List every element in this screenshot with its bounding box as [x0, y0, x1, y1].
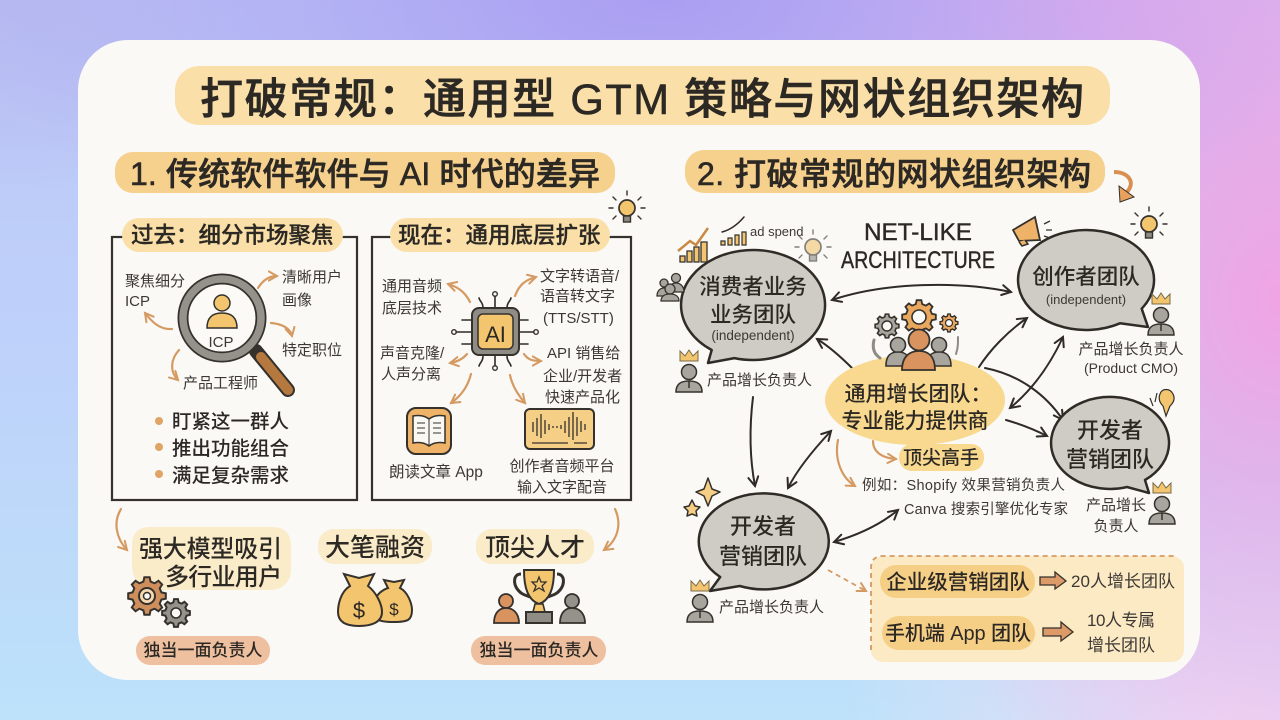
text: specific role: 特定职位 [282, 342, 342, 359]
text: TTS STT [540, 268, 620, 327]
tag: solo lead left [136, 636, 270, 665]
arrows: chip [448, 277, 541, 403]
heading: net-like architecture: ARCHITECTURE [841, 247, 995, 274]
icon: bulb [609, 191, 645, 222]
icon: money bags: $ [353, 598, 365, 623]
bullet list: 推出功能组合 [172, 438, 289, 460]
icon: lightning spark [1150, 390, 1174, 416]
title: 打破常规：通用型 GTM 策略与网状组织架构 [200, 76, 1084, 124]
icon: team with gears [873, 300, 958, 370]
row: enterprise marketing: 企业级营销团队 [886, 571, 1030, 594]
main card [78, 40, 1200, 680]
bubble: developer marketing team right: 营销团队 [1066, 447, 1154, 472]
heading: net-like architecture [841, 219, 995, 274]
panel: present general expansion: 现在：通用底层扩张 [398, 223, 601, 248]
arrow: left down [116, 509, 127, 550]
network arrows [751, 285, 1063, 591]
heading: section 2: 2. 打破常规的网状组织架构 [697, 156, 1091, 192]
bubble: developer marketing team right [1051, 397, 1169, 493]
row: enterprise marketing [880, 565, 1175, 598]
arrow: right down [604, 509, 618, 550]
panel: present general expansion [372, 191, 645, 500]
icon: stars [684, 478, 720, 516]
bubble: developer marketing team left [699, 493, 829, 591]
leader: creator team: 产品增长负责人 [1078, 341, 1184, 358]
text: product engineer: 产品工程师 [183, 375, 258, 392]
leader: developer team left [687, 580, 824, 622]
central growth team: 专业能力提供商 [842, 410, 988, 433]
icon: creator bulb [1131, 207, 1167, 238]
panel: past niche focus: 画像 [282, 292, 312, 309]
icon: book app [407, 408, 451, 454]
text: general audio base tech: 通用音频 [382, 278, 442, 295]
central growth team: 通用增长团队： [844, 383, 992, 406]
row: mobile app [882, 611, 1155, 655]
callout: strong model: 强大模型吸引 [139, 536, 282, 563]
leader: developer team right [1086, 482, 1175, 535]
bubble: consumer business team [681, 250, 825, 363]
heading: net-like architecture: NET-LIKE [864, 219, 972, 246]
icon: waveform [525, 409, 594, 449]
tag: solo lead right: 独当一面负责人 [480, 641, 598, 660]
text: reading app: 朗读文章 App [389, 463, 483, 481]
text: TTS STT: 文字转语音/ [540, 268, 620, 285]
bullet list [155, 411, 289, 487]
bubble: consumer business team: 消费者业务 [699, 275, 807, 299]
text: examples [862, 477, 1068, 518]
callout: strong model [132, 527, 291, 591]
callout: top talent: 顶尖人才 [485, 534, 585, 562]
panel: past niche focus: ICP [125, 293, 150, 310]
bullet list: 盯紧这一群人 [172, 411, 289, 433]
text: focus ICP: 聚焦细分 [125, 273, 185, 290]
row: mobile app: 手机端 App 团队 [885, 622, 1031, 645]
icon: trophy with people [494, 570, 585, 623]
text: API sales: 快速产品化 [545, 389, 620, 406]
arrows: magnifier [145, 276, 292, 380]
leader: developer team left: 产品增长负责人 [719, 599, 824, 616]
callout: top talent [476, 529, 594, 564]
callout: strong model: 多行业用户 [165, 564, 282, 591]
leader: developer team right: 负责人 [1093, 518, 1139, 535]
tag: top experts [899, 444, 984, 471]
row: enterprise marketing: 20人增长团队 [1071, 572, 1175, 591]
text: creator audio platform: 创作者音频平台 [509, 458, 615, 475]
tag: top experts: 顶尖高手 [903, 447, 979, 469]
panel: section 1 [112, 152, 645, 665]
leader: creator team [1078, 293, 1184, 376]
bubble: developer marketing team left: 开发者 [730, 514, 796, 539]
icon: money bags: $ [389, 600, 399, 619]
panel: present general expansion: 人声分离 [381, 365, 441, 383]
bubble: developer marketing team left: 营销团队 [719, 544, 807, 569]
tag: solo lead left: 独当一面负责人 [144, 641, 262, 660]
text: TTS STT: (TTS/STT) [543, 310, 614, 327]
text: API sales [543, 345, 622, 406]
text: clear persona: 清晰用户 [282, 269, 342, 286]
panel: present general expansion: 输入文字配音 [517, 479, 607, 496]
arrow: heading curl [1114, 172, 1134, 202]
icon: growth charts and ad spend [678, 217, 804, 262]
icon: megaphone [1013, 217, 1052, 246]
panel: example team sizes [871, 556, 1184, 662]
icon: money bags [338, 574, 412, 626]
leader: developer team right: 产品增长 [1086, 497, 1146, 514]
bubble: developer marketing team right: 开发者 [1077, 418, 1143, 443]
bubble: creator team: (independent) [1046, 292, 1126, 307]
callout: big funding: 大笔融资 [325, 534, 425, 562]
bubble: consumer business team: 业务团队 [710, 303, 796, 327]
icon: magnifier with ICP: ICP [208, 334, 234, 351]
icon: pale bulb [795, 230, 831, 261]
icon: people group [657, 274, 684, 301]
bubble: creator team [1018, 230, 1154, 330]
panel: past niche focus: 过去：细分市场聚焦 [131, 223, 334, 248]
icon: AI chip: AI [485, 322, 506, 347]
row: mobile app: 增长团队 [1087, 636, 1155, 655]
bubble: creator team: 创作者团队 [1032, 265, 1140, 289]
row: mobile app: 10人专属 [1087, 611, 1155, 630]
leader: creator team: (Product CMO) [1084, 360, 1178, 376]
panel: past niche focus [112, 218, 357, 500]
panel: present general expansion: 底层技术 [382, 300, 442, 317]
leader: consumer team: 产品增长负责人 [707, 372, 812, 389]
text: API sales: API 销售给 [547, 345, 620, 362]
bubble: consumer business team: (independent) [711, 328, 795, 343]
text: examples: Canva 搜索引擎优化专家 [904, 501, 1068, 518]
icon: growth charts and ad spend: ad spend [750, 224, 804, 239]
panel: section 2 net-like organisation [657, 150, 1184, 662]
icon: AI chip [452, 292, 538, 370]
icon: magnifier with ICP [183, 279, 288, 390]
text: voice cloning: 声音克隆/ [380, 344, 445, 362]
text: examples: 例如：Shopify 效果营销负责人 [862, 477, 1065, 494]
central growth team [825, 355, 1005, 445]
heading: section 1: 1. 传统软件软件与 AI 时代的差异 [130, 156, 600, 192]
leader: consumer team [676, 350, 812, 392]
bullet list: 满足复杂需求 [172, 465, 289, 487]
text: TTS STT: 语音转文字 [540, 288, 615, 305]
text: API sales: 企业/开发者 [543, 367, 622, 385]
icon: gears [128, 577, 190, 627]
tag: solo lead right [471, 636, 606, 665]
